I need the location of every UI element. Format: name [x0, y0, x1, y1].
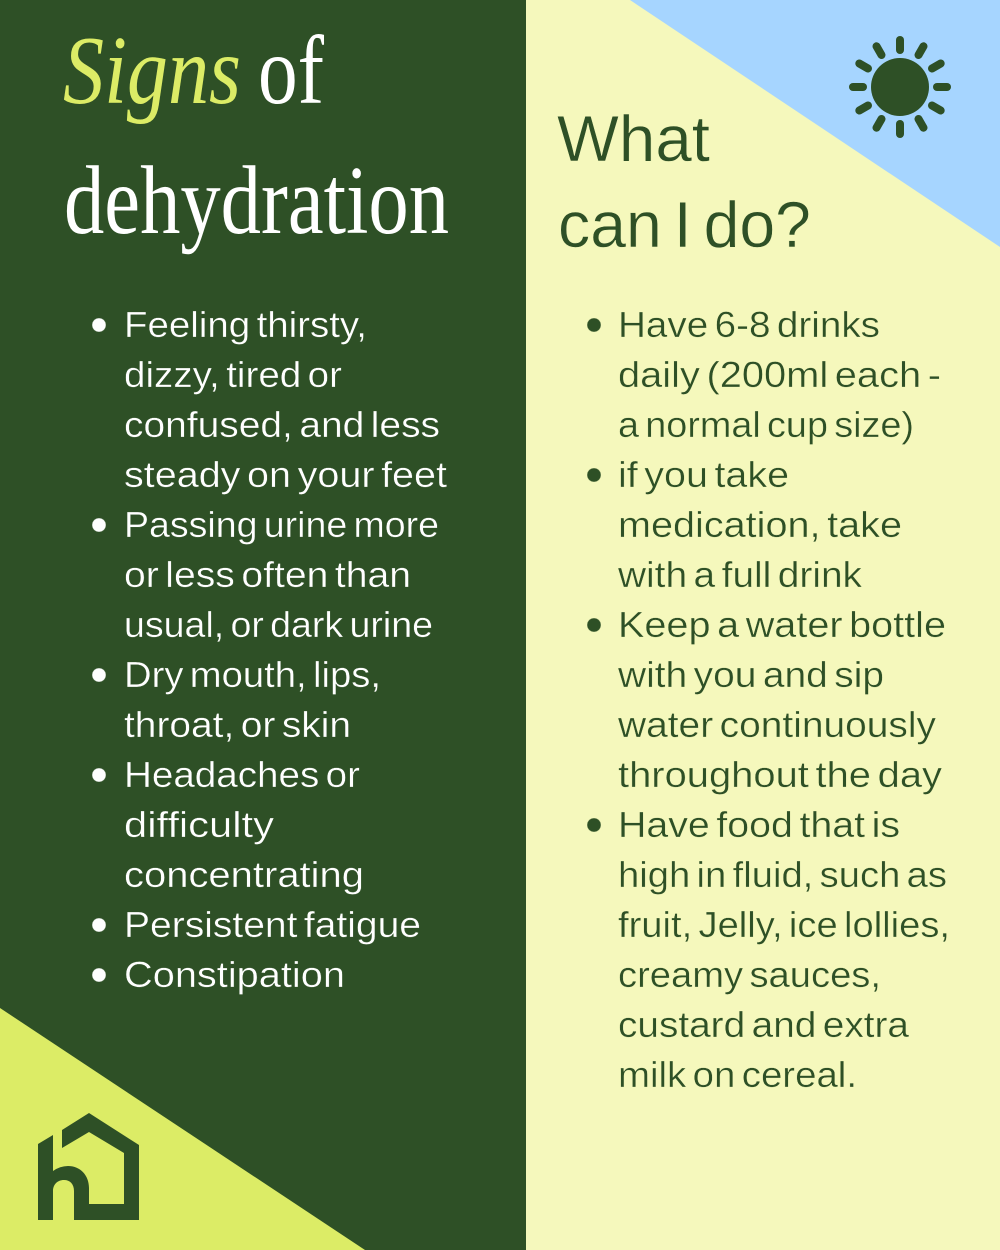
bullet item: headaches: difficulty [124, 804, 274, 845]
bullet item: dry mouth [92, 654, 381, 745]
bullet item: thirsty: steady on your feet [124, 454, 447, 495]
bullet item: medication: medication, take [618, 504, 902, 545]
lime corner triangle [0, 1008, 365, 1250]
bullet item: water bottle [587, 604, 946, 795]
bullet item: headaches: Headaches or [124, 754, 360, 795]
title word: Signs: Signs [63, 17, 241, 125]
bullet item: thirsty: confused, and less [124, 404, 440, 445]
bullet item: thirsty [92, 304, 447, 495]
bullet item: thirsty: dizzy, tired or [124, 354, 342, 395]
icon: house logo [38, 1113, 139, 1220]
list: signs of dehydration [92, 304, 447, 995]
icon: sun [853, 40, 947, 134]
bullet item: medication [587, 454, 902, 595]
bullet item: water bottle: throughout the day [618, 754, 942, 795]
bullet item: dry mouth: Dry mouth, lips, [124, 654, 381, 695]
bullet item: thirsty: Feeling thirsty, [124, 304, 367, 345]
bullet item: food: milk on cereal. [618, 1054, 857, 1095]
bullet item: urine: Passing urine more [124, 504, 439, 545]
bullet item: food: creamy sauces, [618, 954, 881, 995]
heading: what can I do: What [557, 102, 710, 175]
bullet item: dry mouth: throat, or skin [124, 704, 351, 745]
bullet item: water bottle: with you and sip [617, 654, 884, 695]
bullet item: food: custard and extra [618, 1004, 910, 1045]
list: what can I do [587, 304, 950, 1095]
bullet item: medication: if you take [618, 454, 789, 495]
blue corner triangle [630, 0, 1000, 247]
heading: what can I do: can I do? [558, 188, 811, 261]
bullet item: drinks: daily (200ml each - [618, 354, 941, 395]
bullet item: drinks [587, 304, 941, 445]
bullet item: urine: usual, or dark urine [124, 604, 433, 645]
bullet item: headaches [92, 754, 364, 895]
bullet item: food: high in fluid, such as [618, 854, 947, 895]
bullet item: fatigue: Persistent fatigue [124, 904, 421, 945]
bullet item: water bottle: water continuously [617, 704, 936, 745]
bullet item: food: fruit, Jelly, ice lollies, [618, 904, 950, 945]
bullet item: water bottle: Keep a water bottle [618, 604, 946, 645]
bullet item: drinks: a normal cup size) [618, 404, 914, 445]
bullet item: food [587, 804, 950, 1095]
panel: what can I do background [526, 0, 1000, 1250]
title: signs of dehydration [63, 17, 449, 255]
bullet item: urine: or less often than [124, 554, 411, 595]
title word: of: of [258, 17, 324, 125]
bullet item: constipation: Constipation [124, 954, 345, 995]
bullet item: headaches: concentrating [124, 854, 364, 895]
panel: signs background [0, 0, 526, 1250]
bullet item: medication: with a full drink [617, 554, 863, 595]
title word: dehydration: dehydration [64, 147, 449, 255]
bullet item: drinks: Have 6-8 drinks [618, 304, 880, 345]
heading: what can I do [557, 102, 811, 261]
bullet item: food: Have food that is [618, 804, 900, 845]
bullet item: urine [92, 504, 439, 645]
